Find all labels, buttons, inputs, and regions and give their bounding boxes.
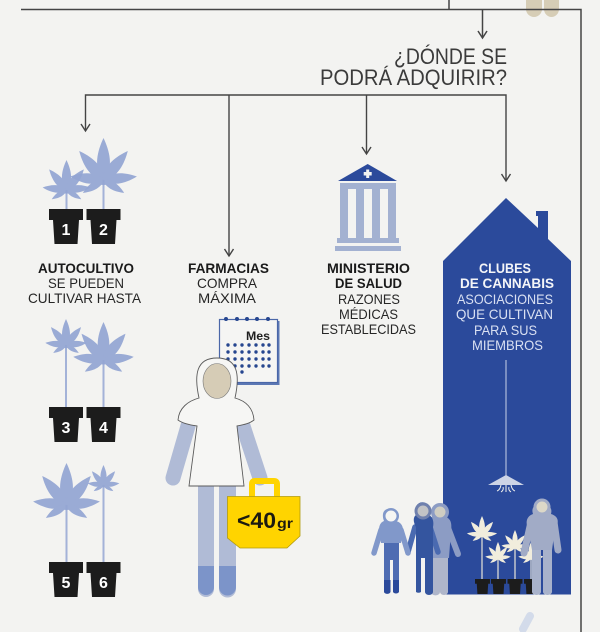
text: clubes: PARA SUS: [474, 322, 537, 338]
text: farmacias: FARMACIAS: [188, 260, 269, 276]
panel: farmacias: [173, 260, 300, 598]
text: farmacias: MÁXIMA: [198, 290, 257, 306]
plants 3 and 4: 4: [99, 420, 108, 437]
icon: feet of figure above (cropped): [526, 0, 559, 17]
text: ministerio: MINISTERIO: [327, 260, 410, 276]
legs: [198, 486, 236, 598]
text: clubes: [456, 260, 554, 353]
flow connector: branches with arrows: [81, 95, 510, 256]
icon: yellow bag: gr: [277, 515, 294, 531]
plants 3 and 4: [45, 319, 134, 442]
heading: question: [320, 44, 507, 90]
plants 3 and 4: 3: [62, 420, 71, 437]
panel: ministerio de salud: [321, 164, 416, 337]
figure: person on right: [524, 498, 558, 595]
text: ministerio: RAZONES: [338, 291, 400, 307]
text: clubes: ASOCIACIONES: [457, 291, 553, 307]
text: ministerio: ESTABLECIDAS: [321, 321, 416, 337]
text: autocultivo: CULTIVAR HASTA: [28, 290, 142, 306]
panel: clubes de cannabis: [374, 198, 571, 595]
figure: person small blue: [374, 508, 408, 594]
arrow: to question: [478, 10, 487, 38]
figure: person in white hood: [173, 358, 260, 598]
plants 5 and 6: 5: [62, 575, 71, 592]
plants 1 and 2: [42, 138, 137, 244]
text: ministerio: MÉDICAS: [339, 306, 398, 322]
text: autocultivo: [28, 260, 142, 306]
plants 1 and 2: 1: [62, 222, 71, 239]
plants 5 and 6: [33, 463, 121, 597]
heading: question: ¿DÓNDE SE: [394, 44, 507, 69]
arms: [173, 426, 260, 478]
figure: person gray hood: [423, 503, 458, 595]
icon: yellow bag: [228, 481, 300, 548]
icon: yellow bag: <40: [237, 508, 276, 533]
text: clubes: QUE CULTIVAN: [456, 306, 553, 322]
plants 1 and 2: 2: [99, 222, 108, 239]
text: clubes: CLUBES: [479, 260, 531, 276]
icon: calendar: [220, 317, 280, 385]
icon: cropped figure at bottom: [523, 616, 530, 629]
text: clubes: MIEMBROS: [472, 337, 543, 353]
text: autocultivo: AUTOCULTIVO: [38, 260, 134, 276]
plants in club: [467, 516, 544, 594]
feet: [198, 566, 236, 596]
plants 5 and 6: 6: [99, 575, 108, 592]
figure: person dark blue: [408, 502, 438, 595]
house shape: [443, 198, 571, 594]
tunic with hood: [178, 358, 254, 486]
text: autocultivo: SE PUEDEN: [48, 275, 124, 291]
icon: hanging lamp: [488, 360, 524, 492]
text: ministerio: [321, 260, 416, 337]
text: clubes: DE CANNABIS: [460, 275, 554, 291]
face: [203, 364, 231, 398]
panel: autocultivo: [28, 138, 142, 597]
icon: calendar: Mes: [246, 329, 270, 343]
text: ministerio: DE SALUD: [335, 275, 402, 291]
heading: question: PODRÁ ADQUIRIR?: [320, 65, 507, 90]
text: farmacias: [188, 260, 269, 306]
icon: government building: [335, 164, 401, 251]
text: farmacias: COMPRA: [197, 275, 258, 291]
